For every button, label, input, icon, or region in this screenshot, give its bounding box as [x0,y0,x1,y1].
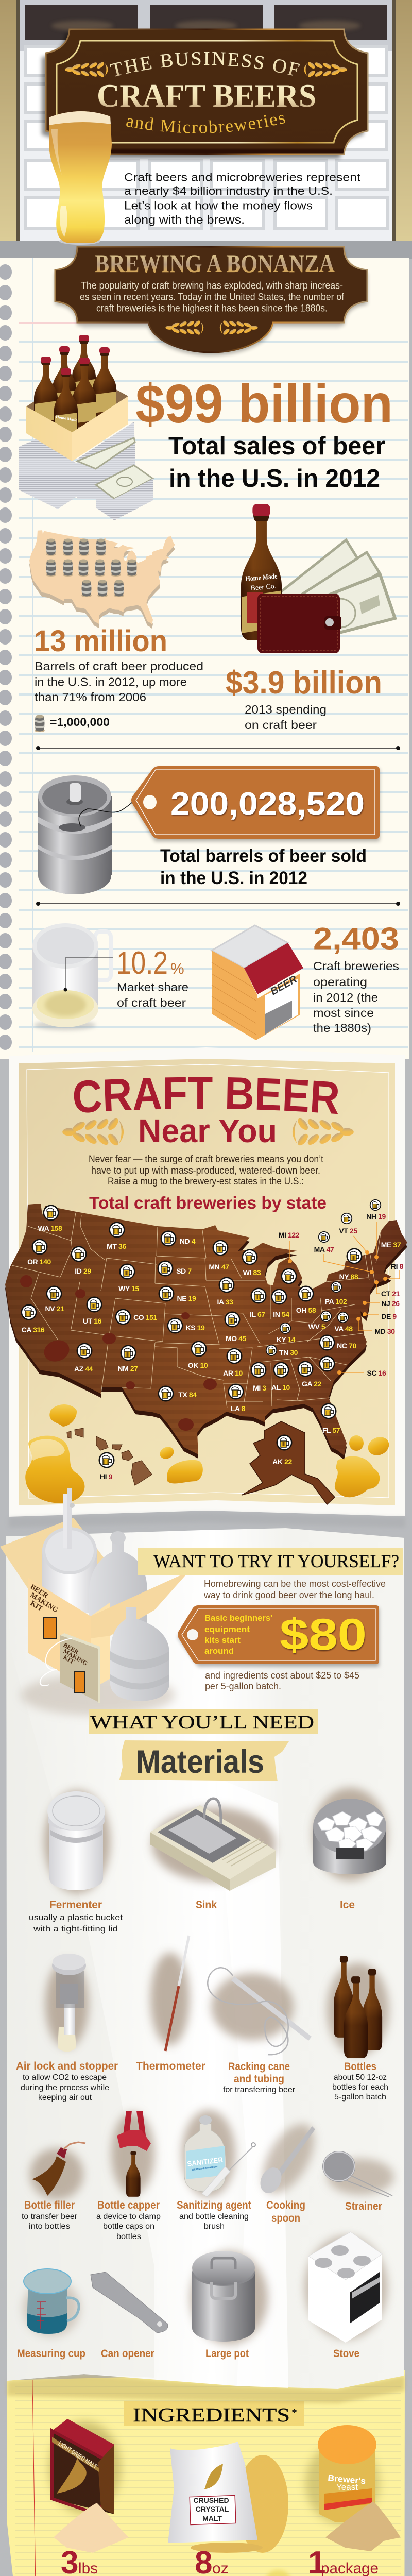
illustration: brewery building [212,925,303,1040]
wallet [258,594,341,653]
state labels: NE 19 [177,1294,196,1302]
icon: wheat right [304,61,347,78]
box back flaps [0,1518,110,1610]
panel: ingredients legal pad [7,2370,405,2576]
book: BEER [62,1641,80,1656]
material: bottle filler: Bottle filler [24,2199,75,2211]
intro text: along with the brews. [124,213,245,226]
material: bottles: about 50 12-oz [334,2073,387,2082]
material: sanitizer and brush: CLEANS AND DISINFECTS [192,2165,218,2171]
homebrewing text: Homebrewing can be the most cost-effective [204,1579,386,1589]
state labels: TN 30 [279,1348,298,1357]
state labels: HI 9 [100,1472,113,1481]
bottle label: Home Made [56,414,78,422]
material: measuring cup [17,2269,85,2360]
state labels: MI 122 [279,1231,300,1239]
state labels: ND 4 [180,1237,196,1245]
material: cooking spoon: spoon [271,2212,300,2224]
material: strainer: Strainer [345,2200,382,2212]
material: cooking spoon: Cooking [266,2199,305,2211]
state labels: AK 22 [272,1458,292,1466]
state labels: NC 70 [337,1342,356,1350]
material: thermometer: Thermometer [136,2060,205,2072]
material: bottle filler: to transfer beer [22,2212,78,2221]
state labels: LA 8 [231,1404,246,1413]
main title sign [39,29,369,161]
material: measuring cup: Measuring cup [17,2348,85,2360]
material: bottle capper: Bottle capper [97,2199,160,2211]
tag [131,766,380,841]
state labels: NV 21 [45,1304,64,1313]
stat: $99 billion: Total sales of beer [168,432,385,460]
ingredient: crushed crystal malt [168,2442,288,2576]
stat: $99 billion [135,374,393,493]
price tag: $80: $80 [280,1610,367,1659]
material: sink [150,1799,276,1911]
title line 1: THE BUSINESS OF [110,52,300,76]
ingredient cost text [205,1670,359,1691]
material: bottles: bottles for each [332,2083,388,2092]
panel: folded white paper [6,1528,405,2403]
material: ice: Ice [340,1899,355,1911]
state labels: TX 84 [178,1391,197,1399]
description: have to put up with mass-produced, watered-down beer. [91,1165,320,1176]
heading: want to try it yourself: WANT TO TRY IT YOURSELF? [153,1551,399,1571]
intro text: Craft beers and microbreweries represent [124,171,360,183]
state labels: IN 54 [273,1310,289,1318]
panel: garage door header [0,0,412,244]
heading: what you'll need [89,1709,318,1734]
material: racking cane [208,1968,310,2094]
intro text: Let’s look at how the money flows [124,199,313,212]
state labels: ME 37 [381,1241,401,1249]
state labels: OR 140 [27,1258,52,1266]
book: KIT [62,1653,76,1666]
heading: CRAFT BEER [74,1077,338,1114]
stat: $3.9 billion: 2013 spending [245,703,327,716]
state labels: OK 10 [188,1361,208,1369]
material: air lock [16,1954,118,2102]
front flap [91,1571,189,1638]
illustration: mug market share: Market share [117,980,188,994]
stat: 13 million: 13 million [34,624,167,658]
ingredient: light dried malt: LIGHT DRIED MALT [57,2439,99,2470]
material: bottles: 5-gallon batch [334,2093,386,2102]
map: Hawaii [67,1428,152,1485]
stat: 13 million: than 71% from 2006 [35,690,146,704]
state labels: NH 19 [366,1212,386,1221]
material: sink: Sink [196,1899,217,1911]
US state map [5,1204,407,1460]
ingredient: brewer's yeast [305,2425,401,2576]
ingredient: brewer's yeast: Brewer's [328,2473,366,2486]
stat: 2,403 breweries: Craft breweries [313,959,399,973]
description [89,1154,324,1187]
material: large pot [191,2251,268,2360]
heading: materials: Materials [136,1744,264,1780]
material: stove [305,2232,387,2360]
illustration: bottle, wallet and dollar bills [241,504,395,653]
tag: 200,028,520 [170,786,365,822]
box label [29,1583,59,1638]
homebrewing text [203,1579,386,1600]
state labels: IA 33 [217,1298,233,1306]
stat: $3.9 billion: on craft beer [245,718,317,732]
state labels: WY 15 [118,1284,139,1293]
heading: INGREDIENTS [133,2404,290,2426]
illustration: mug market share [32,923,188,1030]
state labels: MN 47 [209,1263,229,1271]
state labels: SD 7 [176,1267,192,1275]
state labels: RI 8 [391,1262,404,1270]
icon: wheat left [65,61,108,78]
price tag: $80: around [204,1646,234,1656]
icon: pint glass of beer [49,111,112,245]
state labels: PA 102 [325,1297,347,1306]
panel: brewing a bonanza sign [55,247,367,355]
material: bottles: Bottles [344,2061,376,2073]
state labels: CO 151 [133,1313,158,1321]
state labels: MT 36 [107,1242,126,1250]
stat: $3.9 billion: $3.9 billion [226,665,382,701]
stat: 2,403 breweries: 2,403 [313,921,399,956]
stat: 2,403 breweries: the 1880s) [313,1021,371,1035]
stat: 2,403 breweries: operating [313,975,367,989]
drips on map [20,1275,217,1431]
heading [124,2401,304,2426]
material: racking cane: and tubing [234,2073,284,2085]
material: strainer [322,2151,394,2212]
material: air lock: to allow CO2 to escape [23,2073,107,2082]
box label: KIT [29,1600,44,1613]
bucket with tubes [42,1488,97,1613]
state labels: OH 58 [296,1306,316,1314]
stat: 13 million: Barrels of craft beer produced [35,659,203,673]
stat: 13 million: in the U.S. in 2012, up more [35,675,187,688]
icon: wheat pair [165,320,258,335]
stat: $99 billion: $99 billion [135,374,393,434]
material: air lock: Air lock and stopper [16,2060,118,2072]
description: craft breweries is the highest it has been since the 1880s. [96,303,328,314]
illustration: brewery building: BEER [269,973,299,997]
material: air lock: keeping air out [38,2093,92,2102]
state labels: UT 16 [83,1317,102,1325]
ingredient: crushed crystal malt: CRUSHED [193,2496,229,2504]
panel: craft beer near you map: Near You [138,1112,277,1149]
material: racking cane: Racking cane [228,2061,290,2073]
state labels [22,1212,404,1481]
book [60,1633,100,1703]
material: bottles [327,1956,389,2102]
state labels: CA 316 [22,1326,45,1334]
material: sanitizer and brush: Sanitizing agent [177,2199,251,2211]
state labels: VA 48 [334,1325,353,1333]
description: Never fear — the surge of craft breweries means you don’t [89,1154,324,1165]
material: bottle capper: bottle caps on [103,2222,154,2231]
heading: what you'll need: WHAT YOU’LL NEED [90,1712,314,1733]
panel: notebook paper [0,258,409,1059]
material: sanitizer and brush: SANITIZER [186,2156,224,2168]
state labels: WV 5 [308,1323,325,1331]
illustration: keg with price tag: Total barrels of beer sold [160,846,367,866]
beer puddles [25,1404,392,1503]
price tag: $80: equipment [204,1624,250,1634]
state labels: DE 9 [381,1312,397,1320]
material: sanitizer and brush [177,2110,255,2231]
state labels: AR 10 [223,1369,243,1377]
state labels: NY 88 [339,1273,358,1281]
illustration: US map with barrels [29,530,175,629]
state labels: SC 16 [367,1369,386,1377]
material: can opener [91,2272,168,2360]
material: cooking spoon [252,2115,324,2224]
state labels: IL 67 [250,1310,265,1318]
material: sanitizer and brush: and bottle cleaning [179,2212,249,2221]
beer mug map markers [21,1199,381,1468]
ingredient: brewer's yeast: Yeast [336,2482,358,2492]
callout lines [290,1222,400,1372]
title line 3: and Microbreweries [126,115,285,133]
description: The popularity of craft brewing has exploded, with sharp increas- [81,280,343,292]
material: fermenter: usually a plastic bucket [29,1913,123,1922]
material: bottle capper: a device to clamp [96,2212,161,2221]
heading: BREWING A BONANZA [95,249,335,278]
state labels: KS 19 [186,1324,205,1332]
material: bottle capper: bottles [116,2232,141,2241]
state labels: AL 10 [271,1383,290,1392]
state labels: GA 22 [302,1380,322,1388]
description: es seen in recent years. Today in the United States, the number of [80,292,345,303]
price tag: $80: Basic beginners' [204,1613,272,1623]
lower jug [110,1607,169,1701]
stat: 2,403 breweries: most since [313,1006,374,1020]
intro text: a nearly $4 billion industry in the U.S. [124,184,333,197]
ingredient: light dried malt [49,2419,129,2576]
state borders [12,1213,381,1408]
illustration: mug market share: % [170,960,184,977]
illustration: six-pack on stacks of money [19,335,153,520]
book: MAKING [62,1647,89,1667]
material: thermometer [136,1936,205,2072]
gray strip under door [0,241,412,259]
state labels: NJ 26 [381,1299,400,1308]
price tag: $80 [178,1605,379,1667]
stat: $99 billion: in the U.S. in 2012 [169,465,380,493]
intro text [124,171,360,226]
state labels: WI 83 [243,1268,261,1277]
illustration: keg with price tag: in the U.S. in 2012 [160,868,307,888]
material: bottle capper [96,2111,161,2241]
stat: 2,403 breweries: in 2012 (the [313,991,378,1004]
heading: want to try it yourself [138,1548,403,1575]
panel: craft beer near you map: Total craft breweries by state [89,1193,327,1212]
material: can opener: Can opener [101,2348,154,2360]
stat: 2,403 breweries [313,921,399,1035]
upper jug [89,1531,147,1633]
ingredient: crushed crystal malt: MALT [202,2514,222,2522]
string [79,800,135,826]
stat: $3.9 billion [226,665,382,732]
panel: craft beer near you map [5,1047,407,1525]
box body [28,1578,91,1690]
description: Raise a mug to the brewery-est states in the U.S.: [108,1176,304,1187]
material: bottle filler [22,2142,85,2231]
homebrewing text: way to drink good beer over the long haul. [203,1590,374,1600]
legend: barrel [35,715,45,732]
state labels: VT 25 [339,1227,357,1235]
material: large pot: Large pot [205,2348,249,2360]
description [80,280,345,314]
state labels: WA 158 [38,1224,62,1232]
illustration: keg with price tag [38,766,380,894]
material: fermenter: Fermenter [49,1899,102,1911]
state labels: CT 21 [381,1290,400,1298]
illustration: bottle, wallet and dollar bills: Beer Co. [250,583,277,592]
box label: BEER [29,1583,50,1600]
material: ice [313,1788,387,1911]
ingredient cost text: and ingredients cost about $25 to $45 [205,1670,359,1681]
material: stove: Stove [333,2348,359,2360]
state labels: ID 29 [75,1267,91,1275]
illustration: mug market share: of craft beer [117,996,186,1009]
illustration: beer making kit [0,1488,189,1716]
state labels: MO 45 [226,1334,247,1343]
title line 2: CRAFT BEERS [97,77,316,114]
stat: 13 million: =1,000,000 [50,716,110,728]
map: Alaska [242,1421,335,1504]
state labels: MD 30 [374,1327,395,1335]
material: air lock: during the process while [21,2083,109,2092]
stat: 10.2 [116,945,168,981]
icon: wheat right [293,1116,354,1147]
material: fermenter [29,1790,123,1934]
state labels: NM 27 [117,1364,138,1372]
material: bottle filler: into bottles [29,2222,70,2231]
state labels: MA 47 [314,1245,334,1253]
state labels: MI 3 [253,1384,266,1392]
material: fermenter: with a tight-fitting lid [33,1925,118,1934]
state labels: AZ 44 [74,1365,93,1373]
illustration: bottle, wallet and dollar bills: Home Made [245,573,278,583]
icon: wheat left [62,1116,124,1147]
state labels: KY 14 [277,1335,296,1344]
ingredient: crushed crystal malt: CRYSTAL [196,2505,229,2513]
heading: * [291,2406,297,2419]
box label: MAKING [29,1591,59,1615]
price tag: $80: kits start [204,1635,241,1645]
stat: 13 million [34,624,203,732]
ingredient cost text: per 5-gallon batch. [205,1681,281,1691]
material: racking cane: for transferring beer [223,2086,296,2094]
state labels: FL 57 [322,1426,340,1434]
material: sanitizer and brush: brush [204,2222,225,2231]
